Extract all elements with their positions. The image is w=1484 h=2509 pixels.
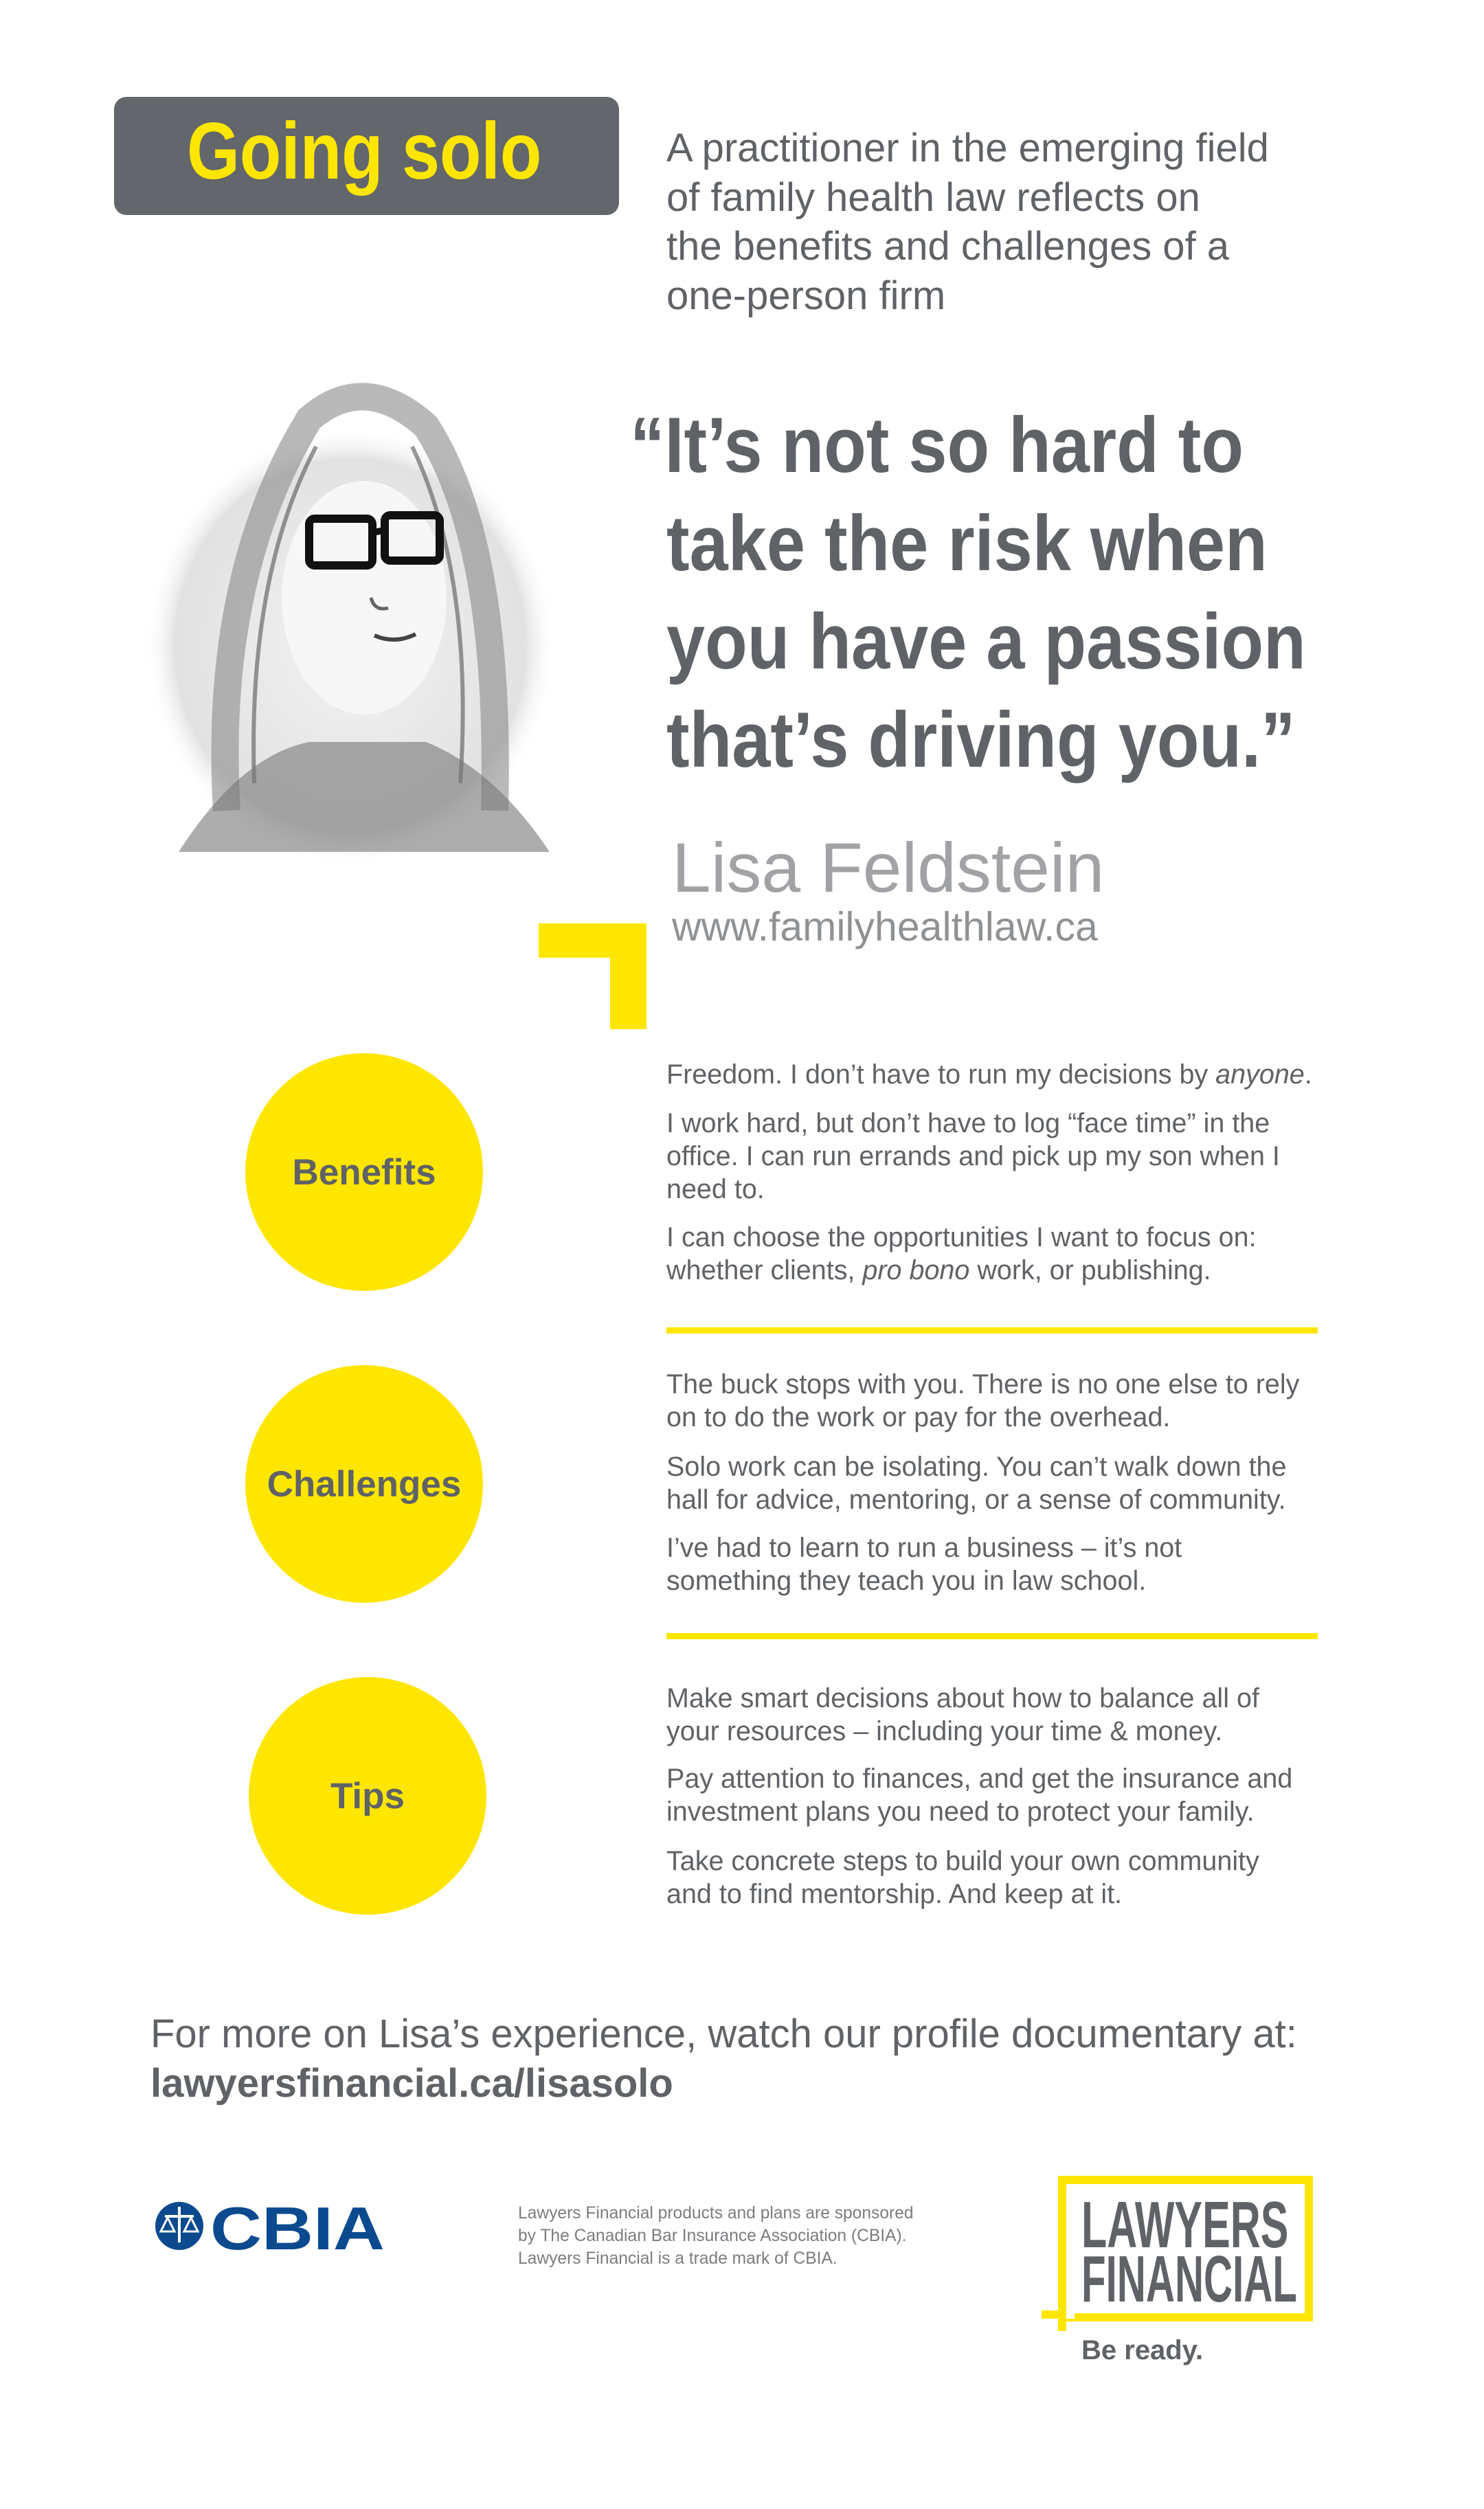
circle: Tips — [249, 1677, 486, 1915]
quote: “It’s not so hard to — [630, 402, 1244, 489]
yellow bracket — [539, 923, 647, 1029]
text: tips: your resources – including your time & money. — [666, 1716, 1222, 1746]
text: challenges: I’ve had to learn to run a business – it’s not — [666, 1533, 1182, 1563]
text: challenges: The buck stops with you. There is no one else to rely — [666, 1369, 1299, 1399]
subtitle: A practitioner in the emerging field — [666, 126, 1269, 170]
subtitle: one-person firm — [666, 273, 945, 317]
text: tips: investment plans you need to protect your family. — [666, 1797, 1255, 1827]
quote — [630, 402, 1306, 784]
logo: CBIA: CBIA — [210, 2194, 385, 2262]
subtitle — [666, 126, 1269, 317]
text: tips — [666, 1683, 1292, 1909]
text: benefits — [666, 1059, 1312, 1285]
text: benefits: I can choose the opportunities I want to focus on: — [666, 1222, 1257, 1252]
disclaimer: by The Canadian Bar Insurance Association (CBIA). — [518, 2227, 907, 2245]
subtitle: the benefits and challenges of a — [666, 224, 1229, 269]
text: tips: and to find mentorship. And keep at it. — [666, 1879, 1122, 1909]
circle: Benefits: Benefits — [292, 1151, 436, 1193]
text: benefits: I work hard, but don’t have to log “face time” in the — [666, 1108, 1270, 1138]
portrait illustration — [161, 383, 550, 852]
text: challenges — [666, 1369, 1300, 1596]
text: benefits: office. I can run errands and pick up my son when I — [666, 1141, 1280, 1171]
text: challenges: Solo work can be isolating. You can’t walk down the — [666, 1452, 1286, 1482]
footer call to action: For more on Lisa’s experience, watch our profile documentary at: — [150, 2012, 1297, 2056]
text: tips: Take concrete steps to build your own community — [666, 1846, 1259, 1876]
logo: Lawyers Financial: FINANCIAL — [1081, 2242, 1297, 2316]
disclaimer: Lawyers Financial is a trade mark of CBIA. — [518, 2249, 837, 2268]
text: benefits: need to. — [666, 1174, 765, 1204]
subtitle: of family health law reflects on — [666, 175, 1200, 220]
text: tips: Make smart decisions about how to balance all of — [666, 1683, 1259, 1713]
circle: Tips: Tips — [330, 1775, 405, 1816]
title text: Going solo — [187, 106, 541, 196]
circle: Benefits — [245, 1053, 483, 1291]
text: challenges: on to do the work or pay for the overhead. — [666, 1402, 1170, 1432]
quote: take the risk when — [666, 500, 1268, 587]
footer call to action: lawyersfinancial.ca/lisasolo — [150, 2061, 673, 2106]
footer call to action — [150, 2012, 1297, 2106]
quote: that’s driving you.” — [666, 697, 1296, 784]
text: tips: Pay attention to finances, and get the insurance and — [666, 1764, 1292, 1794]
disclaimer: Lawyers Financial products and plans are sponsored — [518, 2204, 914, 2223]
quote: you have a passion — [666, 598, 1306, 686]
logo: Lawyers Financial: LAWYERS — [1081, 2188, 1288, 2262]
logo: Lawyers Financial: Be ready. — [1081, 2335, 1203, 2365]
text: challenges: hall for advice, mentoring, or a sense of community. — [666, 1485, 1286, 1515]
disclaimer — [518, 2204, 914, 2268]
circle: Challenges: Challenges — [267, 1463, 461, 1505]
logo: Lawyers Financial — [1042, 2176, 1313, 2365]
circle: Challenges — [245, 1365, 483, 1603]
attribution url: www.familyhealthlaw.ca — [672, 904, 1098, 949]
text: benefits: whether clients, pro bono work, or publishing. — [666, 1255, 1211, 1285]
attribution name: Lisa Feldstein — [672, 829, 1104, 907]
text: challenges: something they teach you in law school. — [666, 1566, 1146, 1596]
text: benefits: Freedom. I don’t have to run my decisions by anyone. — [666, 1059, 1312, 1090]
title box — [114, 97, 619, 215]
